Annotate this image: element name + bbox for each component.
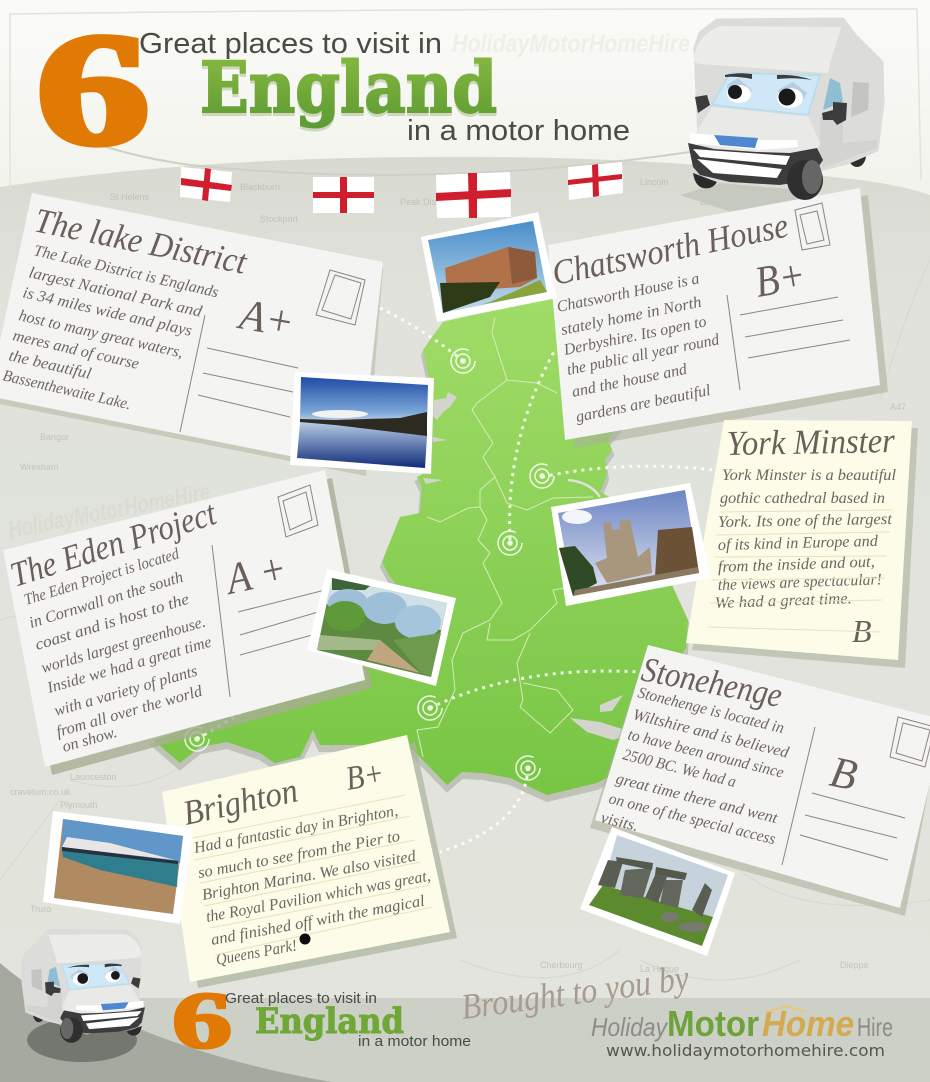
panel: The Eden Project postcard: The Eden Project [6,493,222,595]
map: England [153,296,688,795]
panel: The Eden Project postcard: on show. [60,724,119,756]
background: faint map detail: Dieppe [840,960,869,970]
panel: The Lake District postcard: largest National Park and [27,264,204,321]
background: faint map detail: Blackburn [240,182,280,192]
panel: The Lake District postcard: is 34 miles wide and plays [21,284,193,340]
small title line 1: Great places to visit in [225,991,377,1007]
photo: Stonehenge [580,827,735,956]
panel: York Minster note: gothic cathedral based in [720,490,885,507]
panel: The Lake District postcard: The Lake District is Englands [32,242,220,301]
background: faint map detail: Peak District [400,197,451,207]
panel: York Minster note: We had a great time. [715,590,852,612]
panel: York Minster note: from the inside and out, [718,554,875,576]
panel: Chatsworth House postcard: the public all year round [565,331,722,379]
map: estuaries [423,392,635,740]
panel: Chatsworth House postcard: and the house and [570,361,689,401]
logo: Holiday Motor Home Hire: Home [762,1003,854,1044]
logo: Holiday Motor Home Hire: Motor [667,1003,759,1044]
map: England outline shadow coast [153,301,688,800]
map: region borders [417,317,593,757]
logo: Holiday Motor Home Hire: Holiday [591,1012,669,1042]
spiral markers [185,349,554,780]
panel: Chatsworth House postcard: gardens are beautiful [574,382,713,426]
panel: York Minster note: of its kind in Europe and [718,533,879,554]
background: faint map detail: Wrexham [20,462,58,472]
panel: The Eden Project postcard: in Cornwall on the south [27,569,185,632]
dotted routes [197,308,716,852]
panel: Stonehenge postcard: to have been around since [626,726,785,782]
panel: The Lake District postcard: host to many great waters, [17,307,185,362]
panel: Stonehenge postcard: Stonehenge [638,650,785,715]
panel: Chatsworth House postcard: B+ [751,250,809,307]
photo: Brighton Pier [43,811,193,924]
panel: Stonehenge postcard: visits. [599,809,640,835]
van ground shadow [680,183,825,215]
panel: The Eden Project postcard: from all over the world [54,683,205,741]
panel: The Lake District postcard: A+ [233,289,298,347]
panel: York Minster note: the views are spectacular! [718,571,882,594]
panel: The Eden Project postcard: with a variety of plants [52,663,199,720]
panel: York Minster note: B [852,613,872,649]
photo: lake [290,372,434,474]
panel: Brighton note: Had a fantastic day in Brighton, [192,802,399,857]
background: upper paper [0,0,930,240]
small title England: England [255,1001,404,1042]
panel: The Lake District postcard: The lake District [31,201,251,282]
panel: Brighton note: the Royal Pavilion which was great, [205,868,432,926]
panel: Stonehenge postcard: on one of the special access [607,790,777,848]
background: faint map detail: La Hague [640,964,679,974]
panel: The Lake District postcard: meres and of course [11,327,141,373]
panel: The Lake District postcard: Bassenthewaite Lake. [1,367,133,413]
panel: The Eden Project postcard: coast and is host to the [33,591,191,654]
logo: Holiday Motor Home Hire [591,1003,893,1044]
panel: York Minster note: York Minster [726,421,895,463]
panel: Chatsworth House postcard: Chatsworth House [549,206,792,293]
panel: The Eden Project postcard: The Eden Project is located [22,545,182,609]
illustration: motor home mascot [688,19,883,200]
bottom road [0,963,332,1082]
panel: The Eden Project postcard [3,470,372,775]
small number 6: 6 [172,977,232,1065]
background: faint map detail: Plymouth [60,800,98,810]
panel: Brighton note: so much to see from the Pier to [197,828,401,882]
background: faint map detail: Cherbourg [540,960,583,970]
watermark logo: HolidayMotorHomeHire [452,30,690,58]
panel: Chatsworth House postcard: Chatsworth House is a [555,270,701,316]
watermark logo on map: HolidayMotorHomeHire [6,478,212,544]
photo: Eden Project [307,569,456,686]
background: faint map detail: Bangor [40,432,69,442]
panel: Chatsworth House postcard [548,188,888,448]
panel: Stonehenge postcard [590,645,930,916]
logo: Holiday Motor Home Hire: Hire [857,1012,893,1042]
title line 3: in a motor home [407,115,630,147]
title England: England [200,49,497,132]
icon: flags bunting [180,162,623,218]
panel: Brighton note: Queens Park! [215,937,298,969]
background: faint map detail: A47 [890,402,906,412]
background: faint map detail: Norwich [760,392,793,402]
header frame [10,9,921,190]
background: faint map detail [0,177,930,980]
panel: York Minster note [686,420,918,668]
panel: Chatsworth House postcard: stately home in North [559,294,703,339]
panel: Brighton note [162,735,457,988]
panel: The Lake District postcard [0,193,383,476]
brought to you by: Brought to you by [459,957,691,1027]
background: faint map detail: cravelum.co.uk [10,787,71,797]
background: faint map detail: Lincoln [640,177,669,187]
background: faint map detail: Stockport [260,214,299,224]
photo: Chatsworth House [421,212,557,322]
background: faint map detail: St Helens [110,192,150,202]
panel: The Eden Project postcard: Inside we had a great time [44,634,214,697]
panel: York Minster note: York. Its one of the largest [718,511,893,531]
small title line 3: in a motor home [358,1034,471,1050]
background: faint map detail: Truro [30,904,51,914]
panel: The Lake District postcard: the beautiful [7,347,93,383]
panel: Chatsworth House postcard: Derbyshire. Its open to [561,313,708,359]
background: faint map detail: Boston [700,197,728,207]
panel: The Eden Project postcard: worlds largest greenhouse. [39,614,208,677]
panel: Stonehenge postcard: great time there and went [614,770,780,827]
title line 1: Great places to visit in [139,28,442,60]
title England: England [200,46,497,129]
number 6: 6 [36,0,150,178]
bunting string [100,145,690,175]
background: faint map detail: Launceston [70,772,117,782]
panel: York Minster note: York Minster is a beautiful [722,467,897,484]
bottom band [0,998,930,1082]
panel: Brighton note: Brighton Marina. We also visited [201,847,418,904]
panel: Brighton note: and finished off with the magical [210,893,427,949]
illustration: small motor home mascot [22,930,145,1062]
panel: Brighton note: Brighton [180,771,301,833]
panel: The Eden Project postcard: A + [219,543,291,604]
panel: Stonehenge postcard: 2500 BC. We had a [621,746,738,791]
panel: Stonehenge postcard: B [826,747,862,800]
website url: www.holidaymotorhomehire.com [606,1041,885,1060]
panel: Stonehenge postcard: Stonehenge is located in [636,684,786,737]
photo: York Minster [551,483,711,606]
panel: Brighton note: B+ [343,755,387,798]
panel: Stonehenge postcard: Wiltshire and is believed [631,706,791,762]
